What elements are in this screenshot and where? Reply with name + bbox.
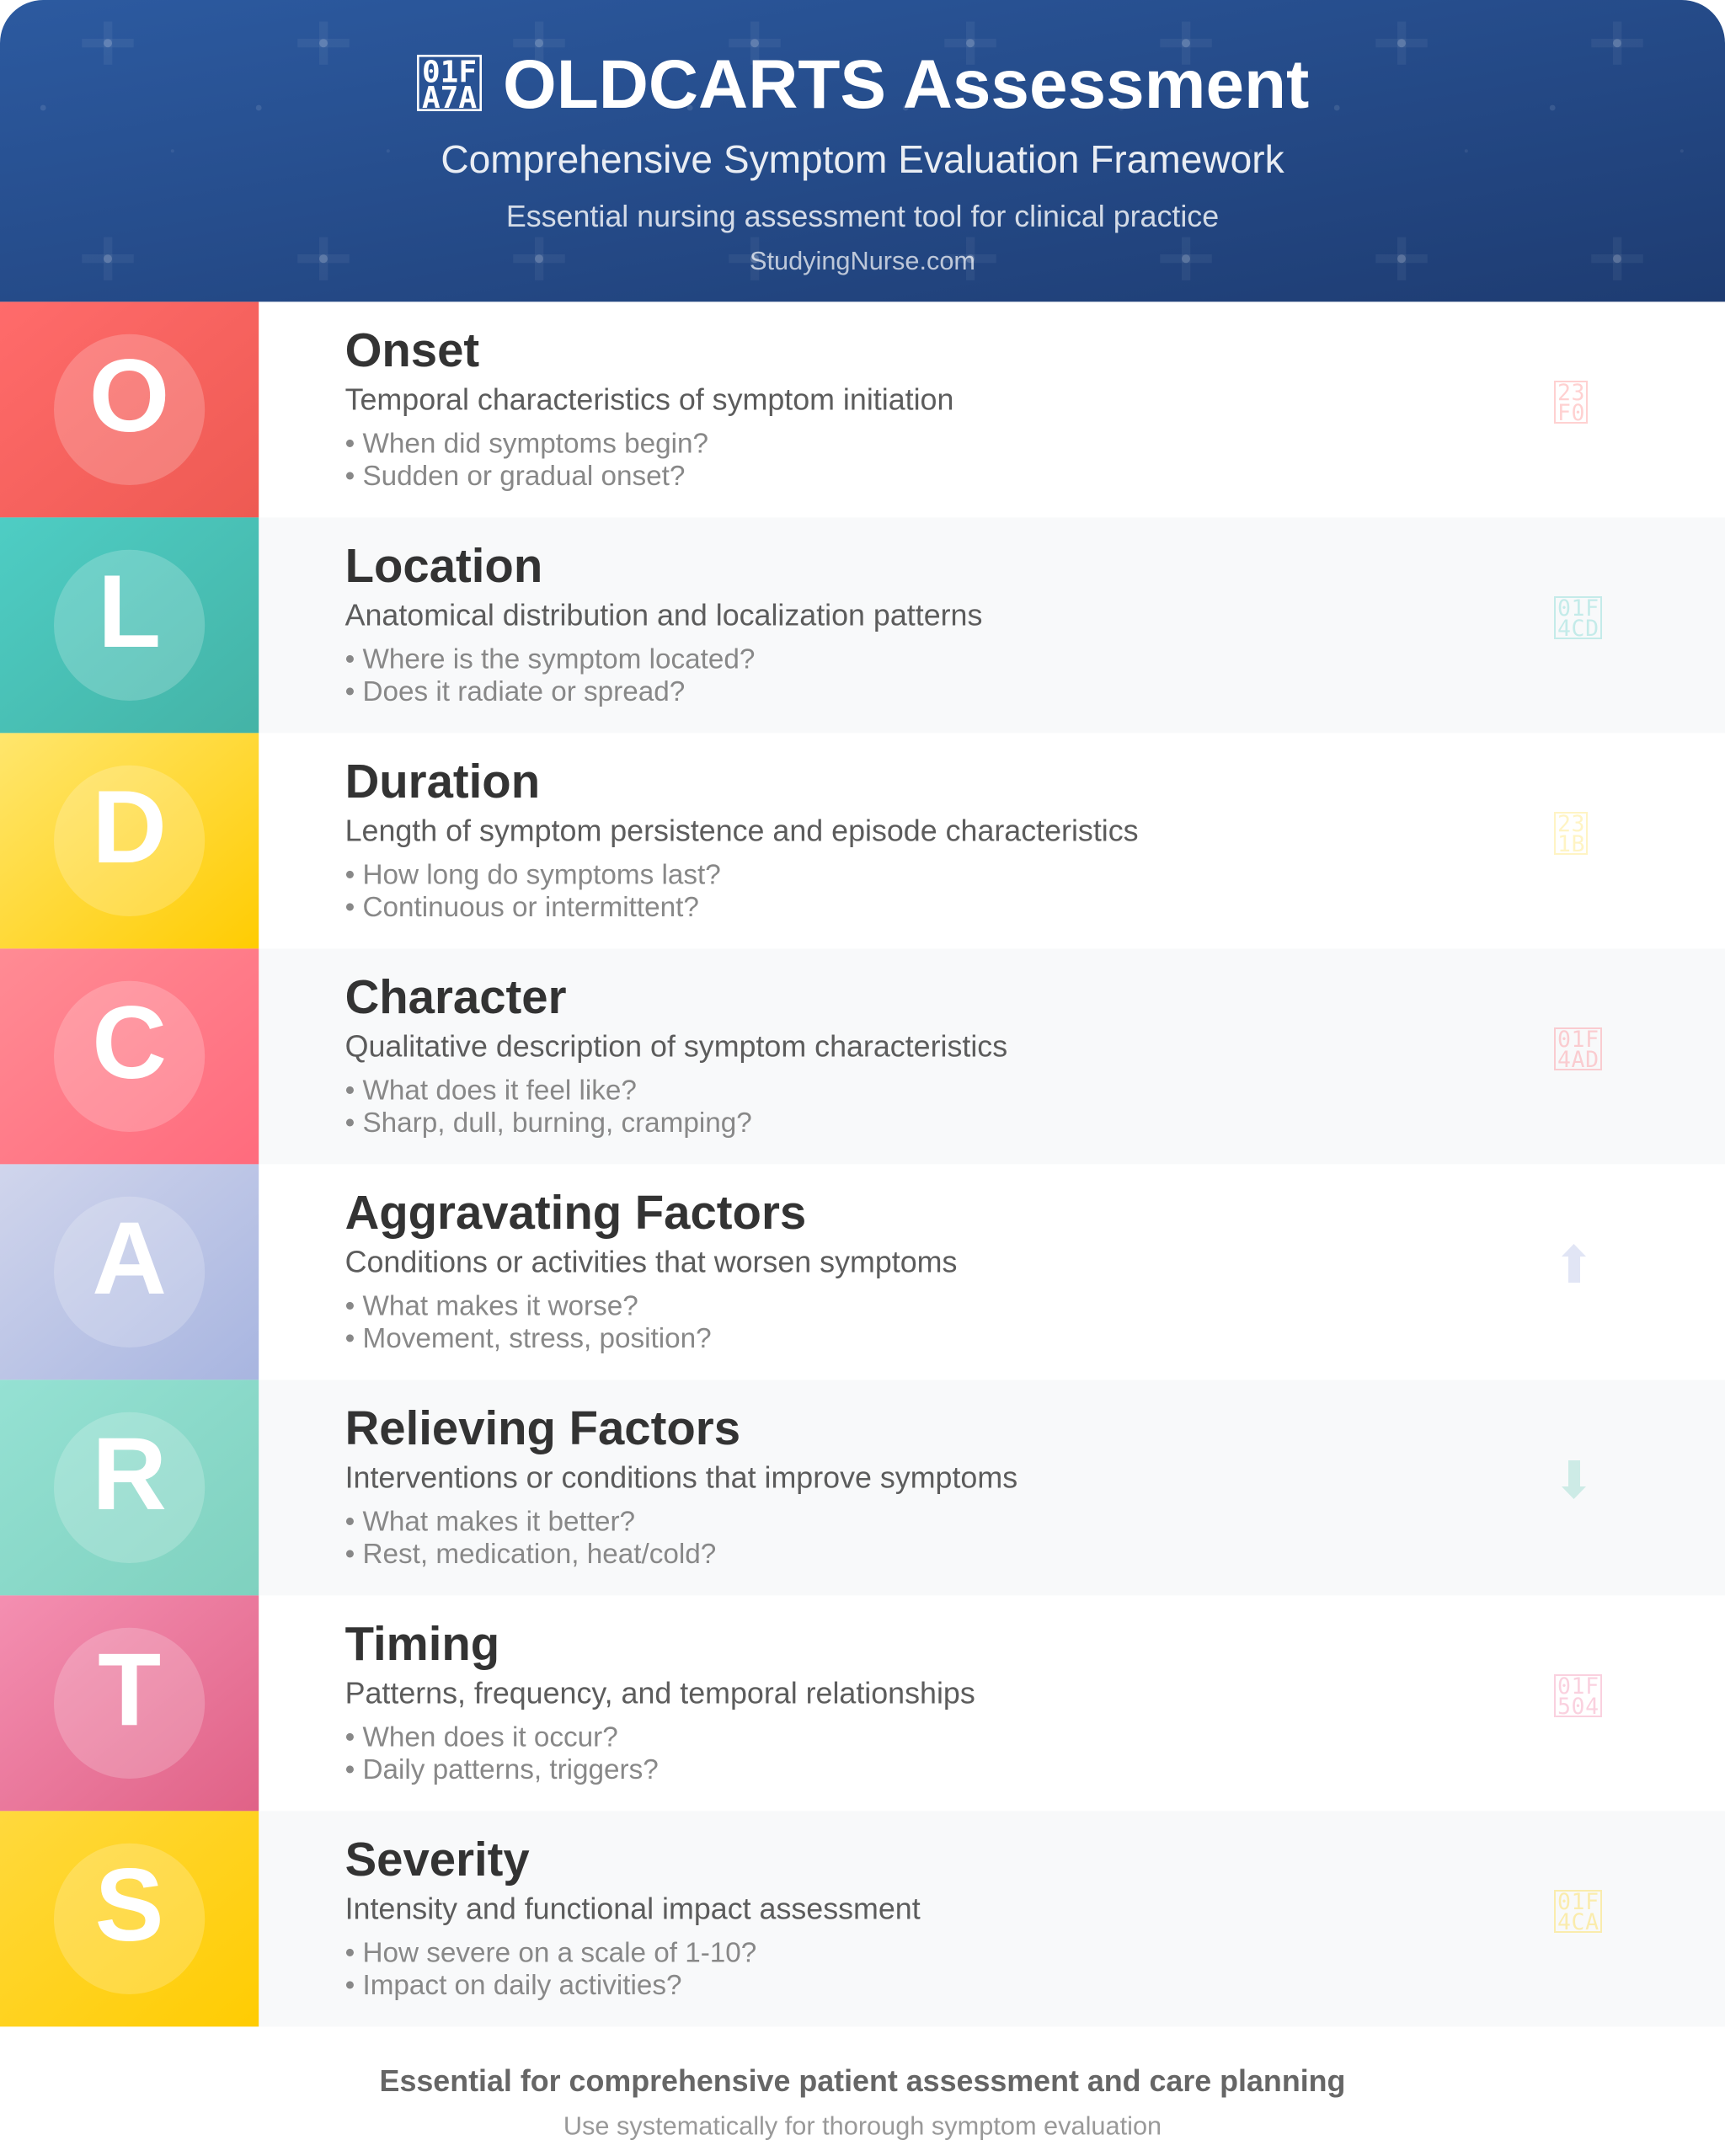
subtitle: Comprehensive Symptom Evaluation Framework — [441, 137, 1285, 181]
icon: 231B tofu: 1B — [1557, 831, 1585, 857]
heading: Severity — [345, 1833, 530, 1886]
row: Timing — [0, 1595, 1725, 1811]
letter block A: A — [92, 1201, 167, 1316]
heading: Character — [345, 970, 567, 1023]
heading: Duration — [345, 755, 540, 808]
questions: • What does it feel like? — [345, 1075, 637, 1107]
heading: Timing — [345, 1617, 499, 1670]
letter block L — [0, 517, 259, 733]
letter block D — [0, 733, 259, 948]
icon: 01F4AD tofu: 4AD — [1557, 1047, 1599, 1073]
icon: 01F4CD tofu: 4CD — [1557, 616, 1599, 642]
letter block R — [0, 1380, 259, 1595]
heading: Aggravating Factors — [345, 1186, 806, 1239]
icon: 01F504 tofu — [1555, 1673, 1601, 1720]
row: Character — [0, 948, 1725, 1164]
questions: • Sudden or gradual onset? — [345, 461, 685, 492]
questions: • How long do symptoms last? — [345, 860, 721, 891]
footer — [380, 2064, 1345, 2140]
tagline: Essential nursing assessment tool for clinical practice — [506, 200, 1219, 233]
description: Interventions or conditions that improve symptoms — [345, 1460, 1017, 1494]
icon: 23F0 tofu: F0 — [1557, 400, 1585, 426]
letter block L: L — [98, 554, 161, 670]
questions: • Daily patterns, triggers? — [345, 1754, 659, 1785]
header panel — [0, 0, 1725, 302]
icon: 01F4CD tofu: 01F — [1557, 595, 1599, 622]
letter block A — [0, 1164, 259, 1380]
questions — [345, 1075, 752, 1139]
icon: 01F4CA tofu: 01F — [1557, 1889, 1599, 1915]
description: Length of symptom persistence and episode characteristics — [345, 814, 1139, 847]
questions — [345, 644, 755, 707]
questions: • Sharp, dull, burning, cramping? — [345, 1107, 752, 1139]
questions: • Where is the symptom located? — [345, 644, 755, 675]
questions — [345, 1507, 716, 1570]
icon: 231B tofu — [1555, 811, 1587, 857]
icon: 01F4CA tofu: 4CA — [1557, 1909, 1599, 1935]
questions — [345, 1938, 756, 2001]
header background — [0, 0, 1725, 302]
description: Intensity and functional impact assessment — [345, 1892, 921, 1925]
description: Patterns, frequency, and temporal relationships — [345, 1676, 975, 1710]
description: Conditions or activities that worsen symptoms — [345, 1245, 957, 1278]
letter block T — [0, 1595, 259, 1811]
letter block S: S — [95, 1848, 164, 1963]
icon: 01F4AD tofu: 01F — [1557, 1027, 1599, 1053]
questions: • Rest, medication, heat/cold? — [345, 1539, 716, 1570]
footer note: Use systematically for thorough symptom evaluation — [563, 2111, 1162, 2140]
questions: • Continuous or intermittent? — [345, 892, 699, 923]
questions: • How severe on a scale of 1-10? — [345, 1938, 756, 1969]
row: Onset — [0, 302, 1725, 517]
title: OLDCARTS Assessment — [503, 46, 1309, 123]
footer headline: Essential for comprehensive patient assessment and care planning — [380, 2064, 1345, 2098]
icon: up arrow — [1562, 1244, 1586, 1283]
row: Location — [0, 517, 1725, 733]
icon: 23F0 tofu — [1555, 380, 1587, 426]
icon: down arrow — [1562, 1460, 1586, 1499]
letter block O: O — [89, 339, 169, 454]
icon: 01F4CA tofu — [1555, 1889, 1601, 1935]
description: Temporal characteristics of symptom initiation — [345, 382, 953, 416]
description: Anatomical distribution and localization patterns — [345, 598, 982, 632]
questions: • What makes it better? — [345, 1507, 635, 1538]
row: Relieving Factors — [0, 1380, 1725, 1595]
website: StudyingNurse.com — [750, 246, 975, 275]
letter block R: R — [92, 1417, 167, 1532]
icon: 01F504 tofu: 01F — [1557, 1673, 1599, 1700]
questions: • When did symptoms begin? — [345, 429, 708, 460]
questions — [345, 860, 721, 923]
questions: • What makes it worse? — [345, 1291, 638, 1322]
icon: 231B tofu: 23 — [1557, 811, 1585, 837]
description: Qualitative description of symptom characteristics — [345, 1029, 1007, 1063]
row: Duration — [0, 733, 1725, 948]
letter block T: T — [98, 1632, 161, 1748]
questions: • Does it radiate or spread? — [345, 676, 685, 707]
questions — [345, 1291, 712, 1354]
questions — [345, 1722, 659, 1785]
questions: • Movement, stress, position? — [345, 1323, 712, 1354]
questions: • When does it occur? — [345, 1722, 618, 1753]
questions — [345, 429, 708, 492]
icon: 01F504 tofu: 504 — [1557, 1694, 1599, 1720]
row: Severity — [0, 1811, 1725, 2026]
icon: title tofu glyph: A7A — [422, 81, 477, 115]
icon: title tofu glyph — [418, 56, 481, 115]
row: Aggravating Factors — [0, 1164, 1725, 1380]
letter block S — [0, 1811, 259, 2026]
icon: 01F4AD tofu — [1555, 1027, 1601, 1073]
heading: Onset — [345, 323, 479, 376]
letter block C: C — [92, 985, 167, 1101]
heading: Relieving Factors — [345, 1401, 740, 1454]
heading: Location — [345, 539, 542, 592]
icon: 23F0 tofu: 23 — [1557, 380, 1585, 406]
icon: title tofu glyph: 01F — [422, 56, 477, 89]
letter block O — [0, 302, 259, 517]
icon: 01F4CD tofu — [1555, 595, 1601, 642]
questions: • Impact on daily activities? — [345, 1970, 682, 2001]
letter block D: D — [92, 770, 167, 885]
letter block C — [0, 948, 259, 1164]
